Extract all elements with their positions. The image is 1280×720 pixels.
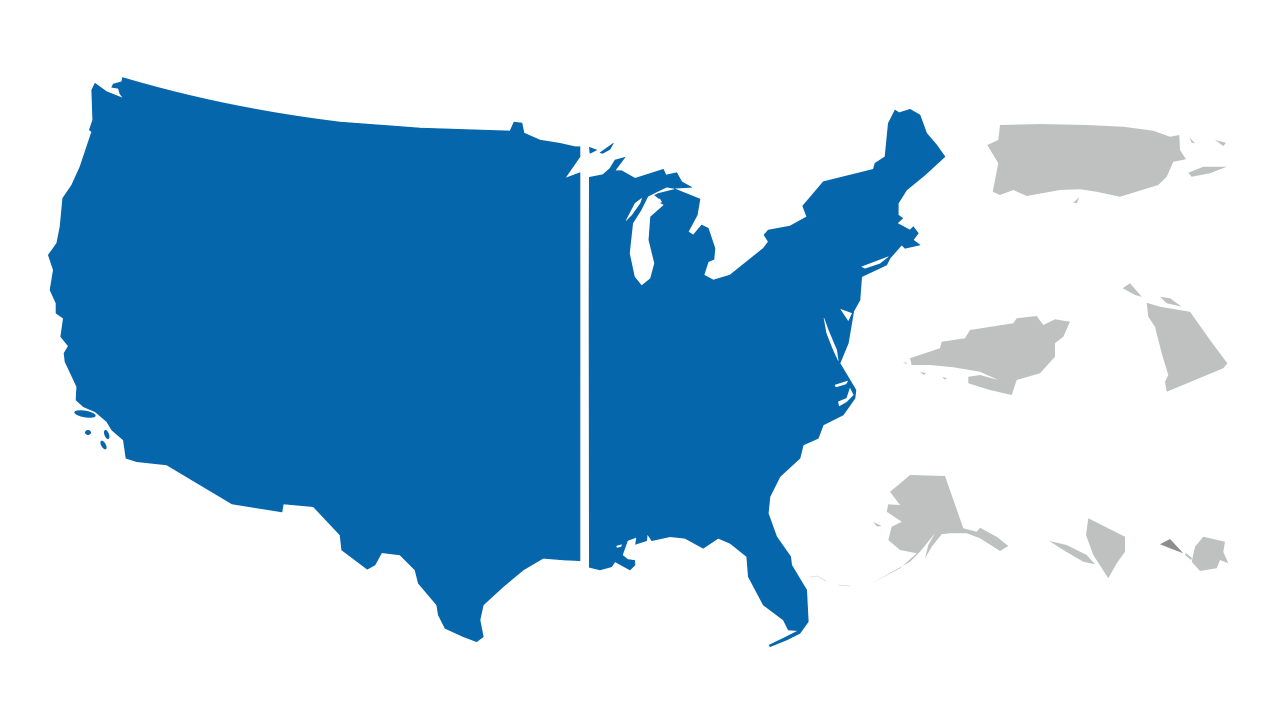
contiguous United States in blue (48, 78, 945, 647)
long island sound (862, 257, 888, 268)
eastern section of mainland (589, 109, 945, 647)
puerto rico shaped territory (987, 124, 1227, 203)
alaska (810, 475, 1008, 586)
superior islands (589, 143, 613, 153)
western section of mainland (48, 78, 580, 642)
delaware bay (841, 309, 852, 321)
lake michigan island (654, 193, 665, 205)
middle island territory (1049, 518, 1125, 578)
mobile bay (623, 538, 636, 560)
western island territory (903, 316, 1070, 395)
green bay (626, 198, 642, 221)
pamlico sound (838, 388, 853, 406)
eastern island territory (1123, 283, 1227, 392)
territories in grey (810, 124, 1228, 586)
gulf coast sliver (617, 545, 622, 548)
chesapeake bay (824, 318, 838, 361)
lake michigan (630, 188, 674, 285)
right island territory (1160, 537, 1228, 571)
albemarle sound (835, 381, 848, 387)
lakes and bays cut out in white (617, 188, 888, 560)
channel islands (74, 409, 110, 450)
